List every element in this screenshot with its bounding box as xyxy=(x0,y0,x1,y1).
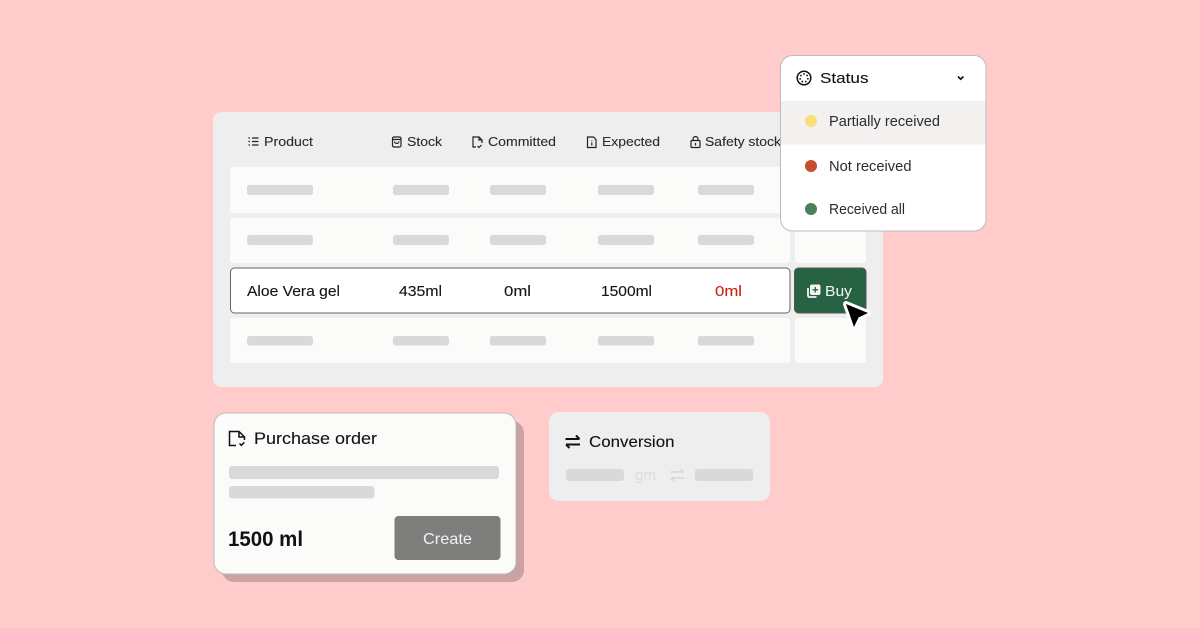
icon: document info xyxy=(588,137,596,148)
icon: swap arrows xyxy=(566,436,580,448)
panel: purchase order card xyxy=(214,413,524,582)
icon: document check xyxy=(230,432,244,446)
panel: conversion card: Conversion xyxy=(589,434,674,451)
icon: list xyxy=(248,138,258,145)
icon: cursor arrow xyxy=(846,304,868,327)
icon: document check xyxy=(473,137,482,148)
table header: Expected xyxy=(602,134,660,149)
icon: status dial xyxy=(797,71,811,85)
table header: Stock xyxy=(407,134,443,149)
table row 4 xyxy=(230,318,866,363)
button: Create: Create xyxy=(423,531,472,548)
button: Create xyxy=(394,516,500,560)
button: Buy xyxy=(794,268,866,313)
option: partially received: Partially received xyxy=(829,114,940,130)
status header xyxy=(797,70,963,87)
icon: add to stack xyxy=(808,284,820,297)
panel: status dropdown xyxy=(780,56,986,231)
table row: Aloe Vera gel xyxy=(230,268,790,313)
table row: Aloe Vera gel: 1500ml xyxy=(601,283,652,300)
table header: Product xyxy=(264,134,313,149)
panel: conversion card: gm xyxy=(635,467,656,484)
option: partially received xyxy=(781,101,986,144)
table row: Aloe Vera gel: Aloe Vera gel xyxy=(247,283,340,300)
button: Buy: Buy xyxy=(825,283,853,300)
icon: lock xyxy=(691,137,700,148)
panel: purchase order card: 1500 ml xyxy=(228,528,303,551)
icon: swap arrows muted xyxy=(670,469,684,481)
icon: bag xyxy=(392,137,401,147)
table row: Aloe Vera gel: 435ml xyxy=(399,283,442,300)
panel: purchase order card: Purchase order xyxy=(254,429,377,448)
table row: Aloe Vera gel: 0ml xyxy=(715,283,742,300)
table header: Safety stock xyxy=(705,134,782,149)
option: received all: Received all xyxy=(829,202,905,218)
table row 1 xyxy=(230,167,866,213)
panel: conversion card xyxy=(549,412,770,501)
table header: Committed xyxy=(488,134,556,149)
status header: Status xyxy=(820,70,868,87)
option: not received: Not received xyxy=(829,159,912,175)
icon: chevron xyxy=(958,76,963,79)
table row: Aloe Vera gel: 0ml xyxy=(504,283,531,300)
table row 2 xyxy=(230,218,866,263)
table header xyxy=(248,134,782,149)
panel: inventory table xyxy=(213,112,883,387)
